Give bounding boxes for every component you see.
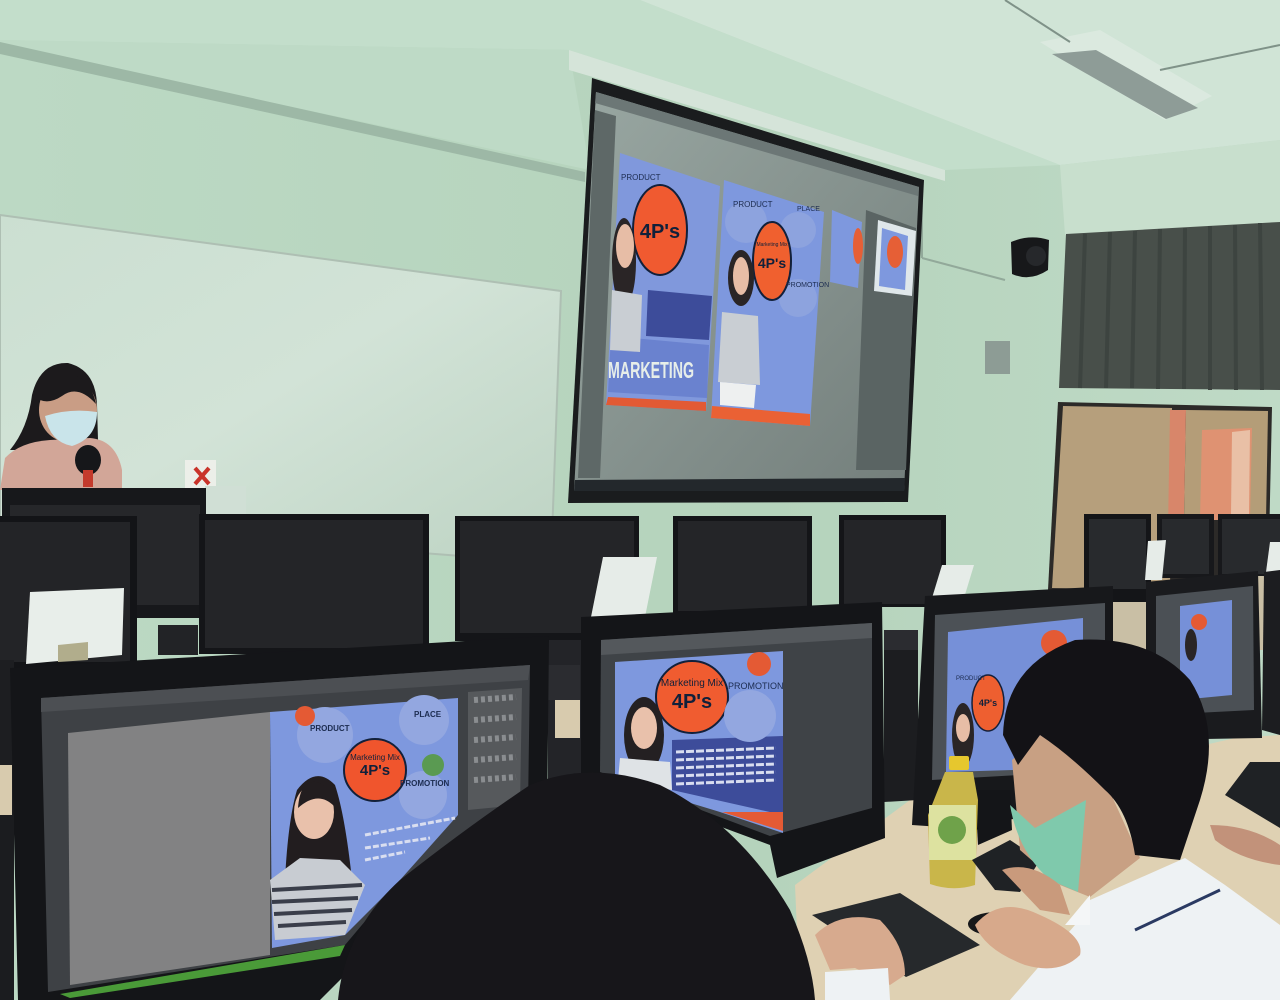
paper card on monitor row [205,486,246,514]
poster page two on the screen: PROMOTION [786,282,829,289]
mouse [968,912,1026,936]
front right monitor one: PRODUCT [956,676,986,682]
keyboard far right [1225,762,1280,828]
whiteboard [0,215,561,563]
front left monitor: PRODUCT [310,724,350,733]
center front monitor: Marketing Mix [661,678,723,689]
front right monitor two [1146,570,1280,740]
back row monitors [0,488,1280,690]
keyboard center [812,893,980,977]
poster page two on the screen: Marketing Mix [756,242,788,248]
window blinds [1059,222,1280,390]
wall switch box [985,341,1010,374]
ceiling light [1005,0,1280,120]
doors [1048,402,1272,590]
projector screen casing [569,50,945,181]
front left monitor: PROMOTION [400,779,450,788]
center front monitor [581,602,885,878]
center front monitor: 4P's [672,691,712,713]
front left monitor: 4P's [360,762,390,779]
juice bottle [928,756,978,888]
wall line right of screen [922,180,1005,280]
front left monitor: Marketing Mix [350,753,400,762]
keyboard right [972,840,1040,892]
front left monitor [10,636,549,1000]
poster page one on the screen [606,153,720,411]
right panels and thumbnails on the screen [830,210,916,470]
front right monitor one [912,586,1113,845]
desk surfaces [0,625,1280,1000]
speaker [1011,237,1049,277]
front right monitor one: 4P's [979,698,997,708]
student front head and hand [338,772,905,1000]
center front monitor: PROMOTION [728,681,784,691]
poster page two on the screen: PRODUCT [733,200,773,209]
red cross card [185,460,216,494]
front left monitor: PLACE [414,710,442,719]
poster page one on the screen: 4P's [640,221,680,243]
paper notes on monitors [26,540,1280,664]
projector screen [568,78,924,503]
left monitor base [0,815,14,1000]
student right [975,640,1280,1000]
poster page two on the screen [711,180,829,426]
presenter [0,363,122,490]
poster page one on the screen: MARKETING [608,357,694,383]
poster page two on the screen: PLACE [797,206,820,213]
poster page two on the screen: 4P's [758,255,786,271]
back desk right [1110,570,1280,650]
poster page one on the screen: PRODUCT [621,173,661,182]
